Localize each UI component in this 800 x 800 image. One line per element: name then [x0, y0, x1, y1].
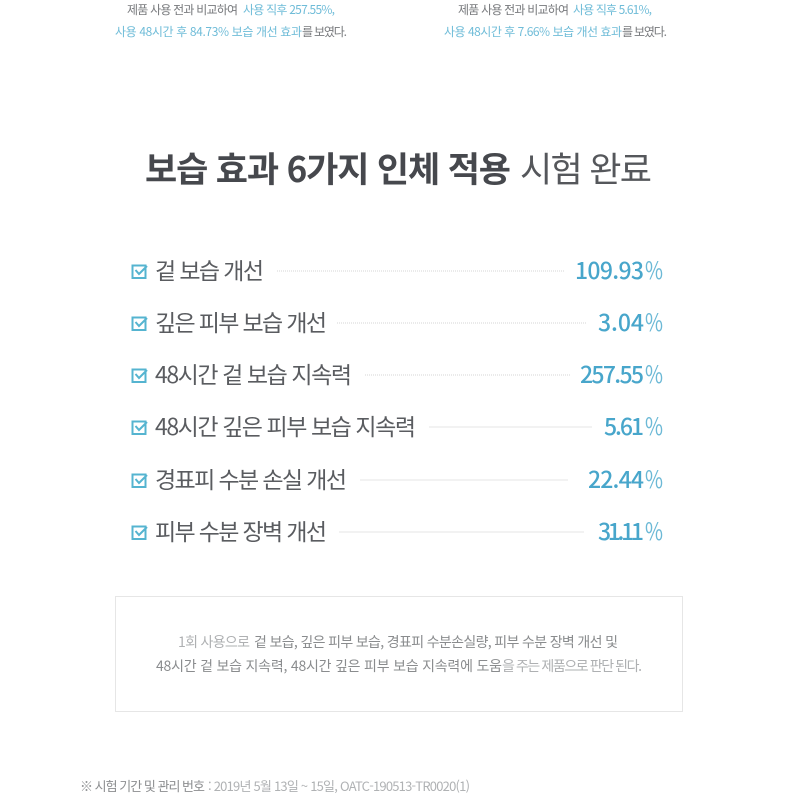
row: surface moisture: 109.93	[575, 252, 644, 286]
summary note box: 을 주는 제품으로 판단 된다.	[502, 656, 642, 676]
row: transepidermal water loss: 경표피 수분 손실 개선	[155, 461, 347, 495]
checklist: six moisture test results	[132, 251, 663, 547]
row: transepidermal water loss: 22.44	[588, 461, 644, 495]
row: 48 hour deep moisture	[132, 407, 663, 442]
caption: right test result: 제품 사용 전과 비교하여	[458, 1, 569, 18]
row: 48 hour surface moisture: %	[645, 355, 663, 390]
caption: right test result: 를 보였다.	[622, 23, 667, 40]
summary note box: 48시간 겉 보습 지속력, 48시간 깊은 피부 보습 지속력에 도움	[156, 656, 502, 676]
row: surface moisture: 겉 보습 개선	[155, 252, 264, 286]
row: surface moisture: %	[645, 251, 663, 286]
row: skin moisture barrier	[132, 512, 663, 547]
footnote: test period and control number: : 2019년 5월 13일 ~ 15일, OATC-190513-TR0020(1)	[208, 776, 470, 795]
row: 48 hour deep moisture: 5.61	[604, 408, 644, 442]
row: surface moisture	[132, 251, 663, 286]
row: 48 hour surface moisture	[132, 355, 663, 390]
caption: left test result: 를 보였다.	[302, 23, 347, 40]
row: deep skin moisture	[132, 303, 663, 338]
row: 48 hour deep moisture: %	[645, 407, 663, 442]
row: skin moisture barrier: 31.11	[598, 513, 644, 547]
caption: left test result: 사용 직후 257.55%,	[243, 1, 335, 18]
row: deep skin moisture: 깊은 피부 보습 개선	[155, 304, 327, 338]
caption: left test result: 사용 48시간 후 84.73% 보습 개선 효과	[115, 23, 302, 40]
caption: right test result	[444, 1, 667, 40]
caption: right test result: 사용 48시간 후 7.66% 보습 개선 효과	[444, 23, 622, 40]
row: skin moisture barrier: %	[645, 512, 663, 547]
row: deep skin moisture: 3.04	[598, 304, 644, 338]
row: skin moisture barrier: 피부 수분 장벽 개선	[155, 513, 327, 547]
row: 48 hour surface moisture: 257.55	[580, 356, 644, 390]
summary note box: 1회 사용으로	[178, 632, 250, 652]
row: deep skin moisture: %	[645, 303, 663, 338]
caption: left test result	[115, 1, 347, 40]
caption: left test result: 제품 사용 전과 비교하여	[127, 1, 238, 18]
title: 시험 완료	[520, 142, 652, 193]
caption: right test result: 사용 직후 5.61%,	[573, 1, 652, 18]
summary note box: 겉 보습, 깊은 피부 보습, 경표피 수분손실량, 피부 수분 장벽 개선 및	[254, 632, 618, 652]
footnote: test period and control number	[80, 776, 470, 795]
row: transepidermal water loss: %	[645, 460, 663, 495]
row: 48 hour deep moisture: 48시간 깊은 피부 보습 지속력	[155, 408, 416, 442]
row: 48 hour surface moisture: 48시간 겉 보습 지속력	[155, 356, 352, 390]
row: transepidermal water loss	[132, 460, 663, 495]
summary note box	[116, 596, 682, 712]
title: 보습 효과 6가지 인체 적용	[145, 142, 511, 193]
footnote: test period and control number: ※ 시험 기간 및 관리 번호	[80, 776, 205, 795]
